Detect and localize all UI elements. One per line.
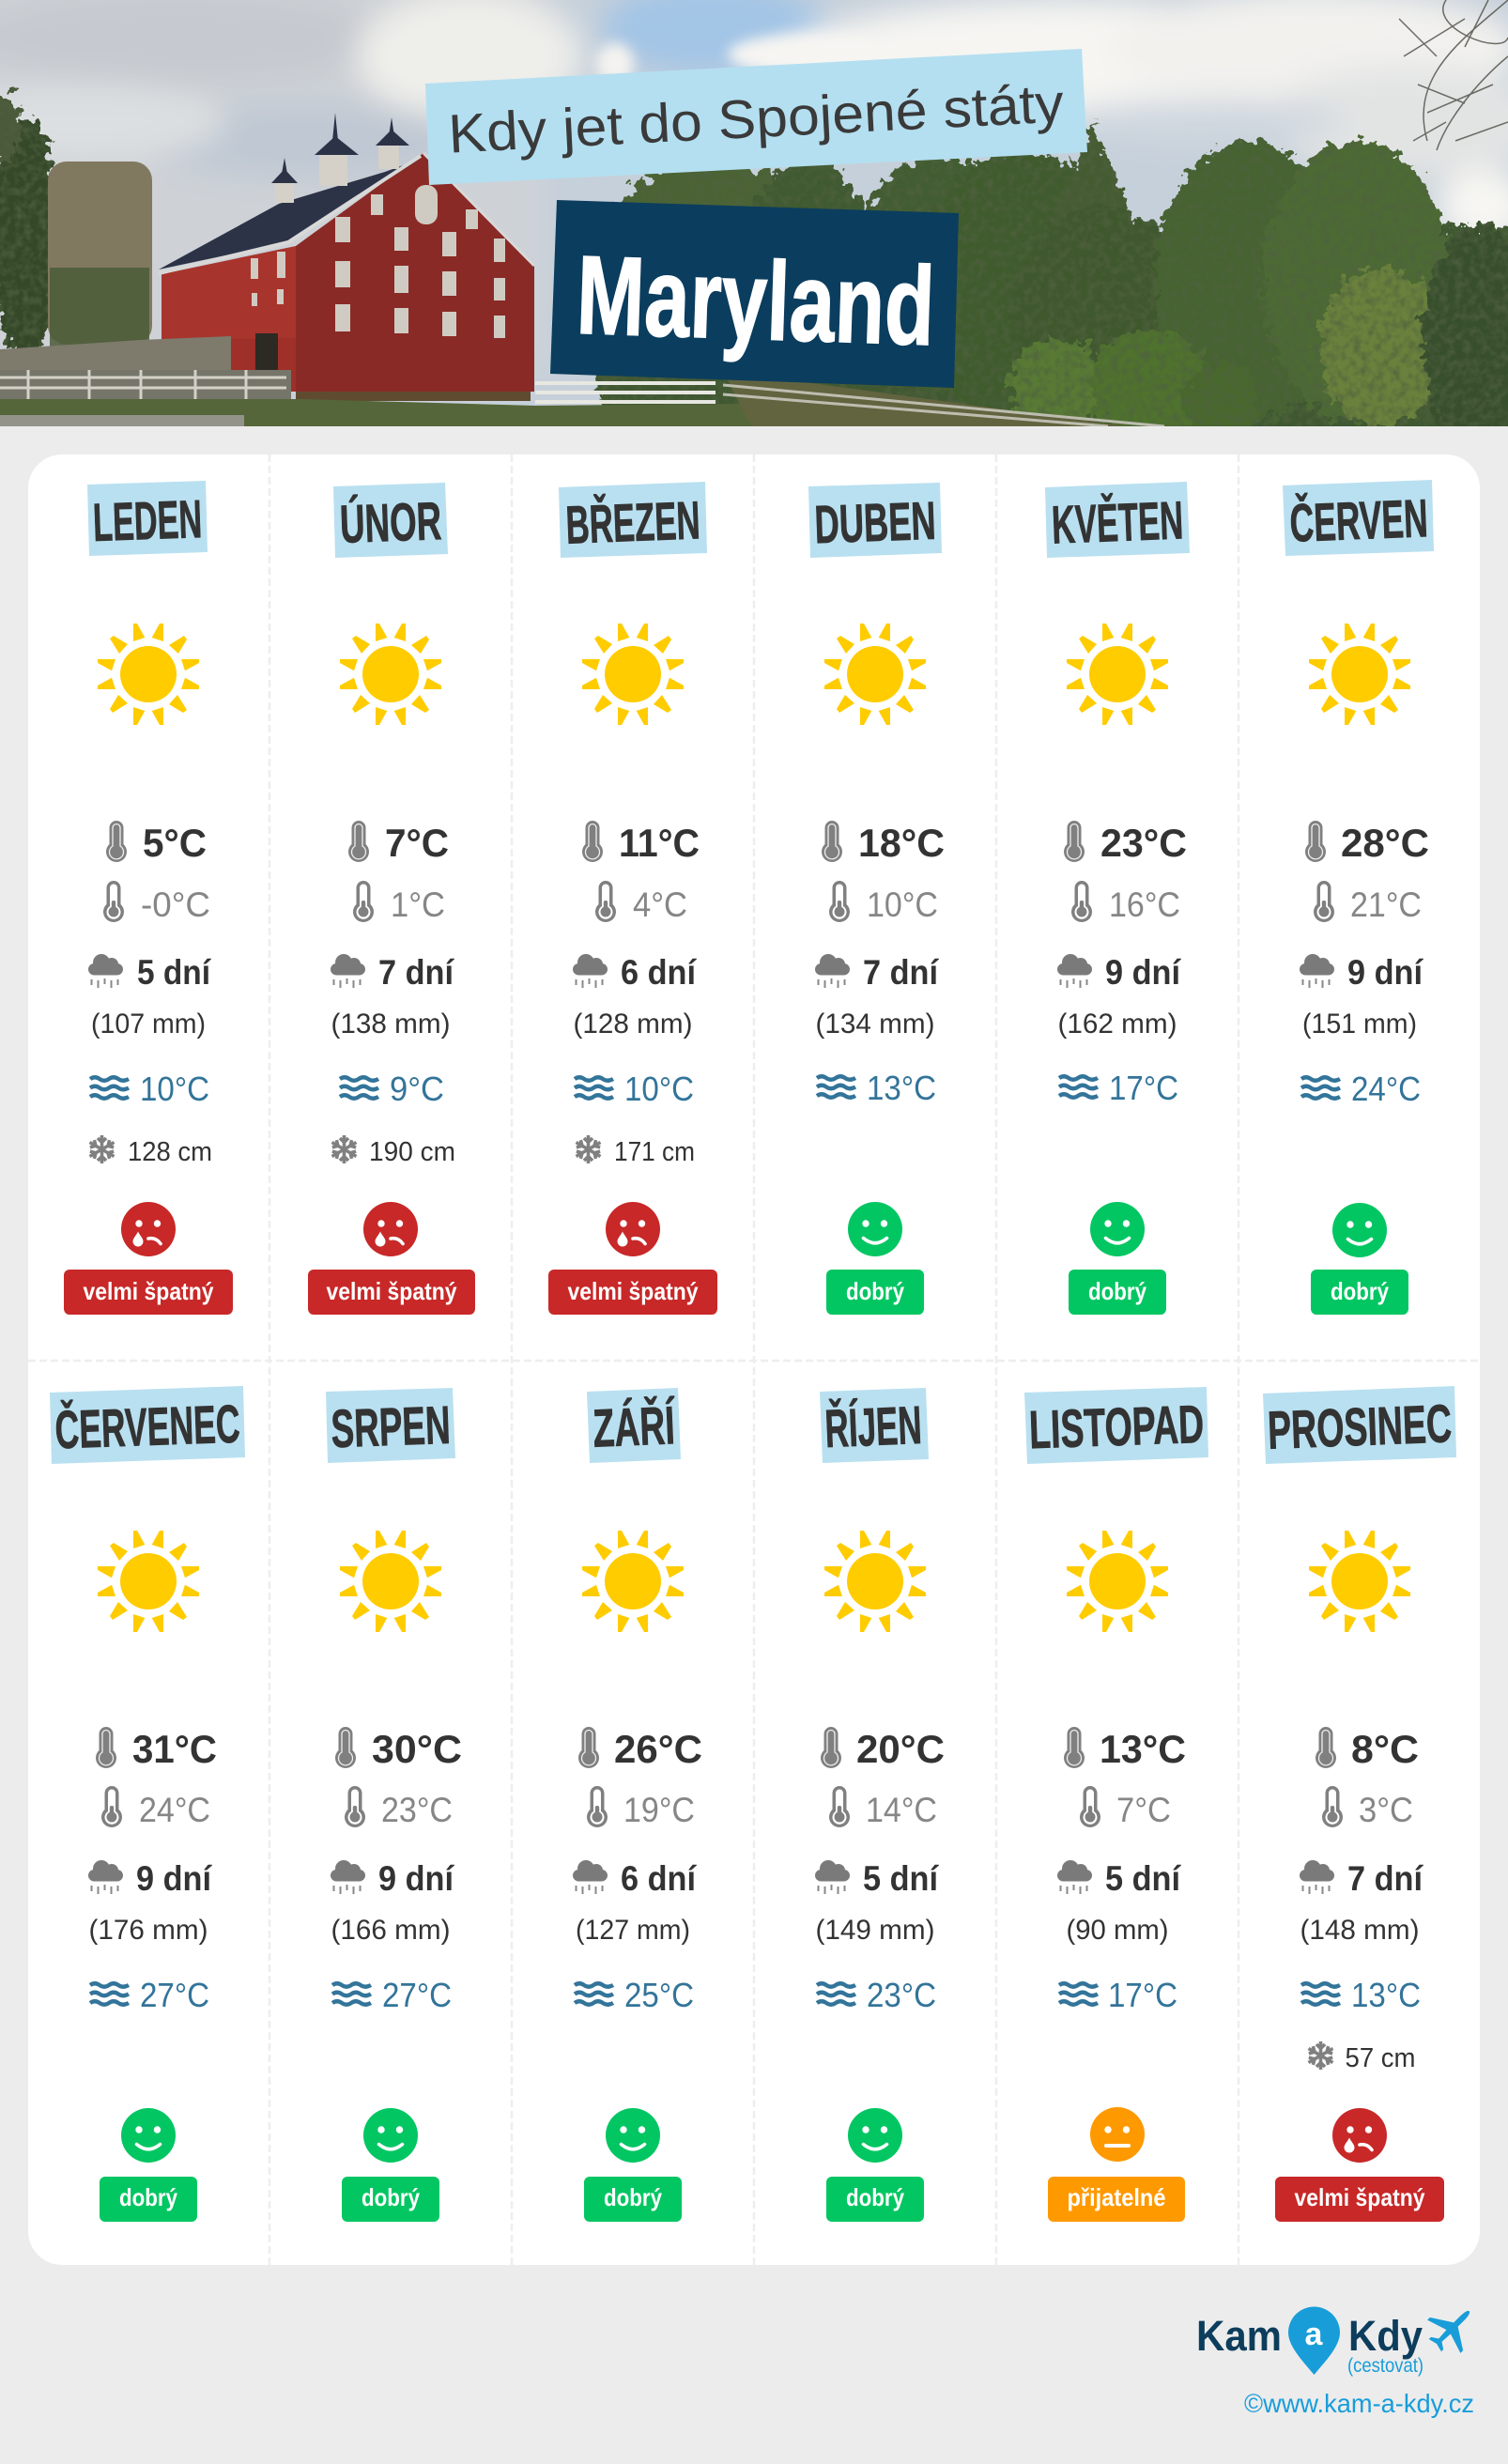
snow depth	[330, 1135, 455, 1167]
rating badge	[1275, 2177, 1444, 2222]
month data: DUBEN	[815, 624, 945, 1315]
rating badge	[1048, 2177, 1185, 2222]
precipitation: (151 mm)	[1302, 1009, 1417, 1040]
icon: good face	[848, 1202, 902, 1256]
icon: sun	[1067, 1531, 1168, 1632]
sea temperature: 17°C	[1108, 1976, 1177, 2014]
icon: sun	[1067, 624, 1168, 725]
precipitation: (166 mm)	[331, 1915, 451, 1946]
sea temperature	[817, 1069, 936, 1107]
month panel: ČERVENEC	[50, 1386, 245, 2222]
precipitation: (176 mm)	[88, 1915, 208, 1946]
min temperature: 24°C	[139, 1791, 210, 1829]
month data: LISTOPAD	[1048, 1531, 1186, 2222]
max temperature	[582, 821, 700, 865]
max temperature: 31°C	[132, 1727, 217, 1771]
rain days: 9 dní	[378, 1859, 455, 1898]
sea temperature	[332, 1976, 452, 2014]
sea temperature: 13°C	[867, 1069, 936, 1107]
snow depth: 171 cm	[614, 1137, 695, 1167]
min temperature	[595, 881, 687, 924]
rating badge	[1069, 1270, 1166, 1315]
title banner: Maryland	[575, 233, 936, 369]
icon: very bad face	[606, 1202, 660, 1256]
header photo: red barn in Maryland	[0, 0, 1508, 451]
month title: SRPEN: SRPEN	[330, 1395, 452, 1459]
month data: BŘEZEN	[548, 624, 717, 1315]
rain days	[88, 953, 212, 992]
month data: SRPEN	[331, 1531, 462, 2222]
icon: sun	[98, 1531, 199, 1632]
precipitation: (90 mm)	[1067, 1915, 1168, 1946]
subtitle banner: Kdy jet do Spojené státy	[447, 72, 1065, 165]
sea temperature	[90, 1070, 209, 1108]
max temperature: 11°C	[619, 821, 700, 865]
max temperature	[348, 821, 449, 865]
rain days: 7 dní	[378, 953, 455, 992]
icon: good face	[606, 2108, 660, 2163]
icon: sun	[582, 624, 684, 725]
month title: ZÁŘÍ	[587, 1388, 681, 1463]
min temperature	[829, 1786, 937, 1829]
rain days: 9 dní	[1347, 953, 1424, 992]
sea temperature: 9°C	[390, 1070, 444, 1108]
rain days	[1300, 953, 1424, 992]
icon: very bad face	[363, 1202, 418, 1256]
icon: sun	[340, 624, 441, 725]
rating badge: přijatelné	[1067, 2183, 1166, 2211]
month data: KVĚTEN	[1057, 624, 1187, 1315]
icon: very bad face	[1332, 2108, 1387, 2163]
rating badge	[1311, 1270, 1408, 1315]
min temperature: 16°C	[1109, 886, 1180, 924]
rain days	[573, 1859, 698, 1898]
rain days	[1057, 953, 1182, 992]
rain days	[1057, 1859, 1182, 1898]
rain days	[331, 1859, 455, 1898]
month data: ŘÍJEN	[815, 1531, 945, 2222]
sea temperature: 27°C	[382, 1976, 452, 2014]
logo word: Kdy: Kdy	[1348, 2312, 1423, 2360]
sea temperature	[1059, 1976, 1177, 2014]
month title: BŘEZEN	[559, 482, 707, 558]
sea temperature: 10°C	[140, 1070, 209, 1108]
precipitation: (149 mm)	[815, 1915, 935, 1946]
month title: BŘEZEN: BŘEZEN	[564, 489, 701, 556]
sea temperature	[1301, 1976, 1421, 2014]
month panel: BŘEZEN	[548, 482, 717, 1315]
sea temperature	[1301, 1070, 1421, 1108]
month title: ČERVEN: ČERVEN	[1288, 487, 1429, 554]
rating badge: dobrý	[846, 2183, 904, 2211]
month title: LEDEN: LEDEN	[92, 489, 203, 553]
max temperature: 18°C	[858, 821, 945, 865]
month title: LISTOPAD: LISTOPAD	[1028, 1394, 1205, 1460]
month panel: ZÁŘÍ	[573, 1388, 702, 2222]
snow depth: 128 cm	[128, 1137, 212, 1167]
sea temperature: 27°C	[140, 1976, 209, 2014]
icon: very bad face	[121, 1202, 176, 1256]
month panel: KVĚTEN	[1045, 482, 1190, 1315]
rain days: 9 dní	[1105, 953, 1182, 992]
icon: good face	[848, 2108, 902, 2163]
min temperature	[1071, 881, 1180, 924]
month title: LEDEN	[87, 481, 208, 556]
snow depth: 190 cm	[369, 1137, 455, 1167]
title banner	[550, 200, 959, 388]
sea temperature	[817, 1976, 936, 2014]
month title: ŘÍJEN: ŘÍJEN	[823, 1394, 923, 1459]
month title: ÚNOR: ÚNOR	[339, 491, 442, 555]
sea temperature: 17°C	[1109, 1069, 1178, 1107]
max temperature: 23°C	[1100, 821, 1187, 865]
rain days: 5 dní	[1105, 1859, 1182, 1898]
max temperature: 28°C	[1341, 821, 1429, 865]
sea temperature	[340, 1070, 444, 1108]
max temperature: 13°C	[1100, 1727, 1186, 1771]
icon: map pin with letter a	[1288, 2306, 1340, 2375]
logo word: Kam: Kam	[1196, 2312, 1282, 2360]
icon: neutral face	[1090, 2107, 1145, 2162]
min temperature	[829, 881, 938, 924]
sea temperature	[1059, 1069, 1178, 1107]
min temperature: 21°C	[1350, 886, 1422, 924]
rating badge: dobrý	[1331, 1277, 1389, 1305]
min temperature	[1314, 881, 1422, 924]
min temperature	[103, 881, 210, 924]
month title: LISTOPAD	[1024, 1387, 1208, 1464]
month data: LEDEN	[64, 624, 233, 1315]
rating badge: velmi špatný	[1294, 2183, 1425, 2211]
min temperature	[101, 1786, 210, 1829]
snow depth	[1306, 2041, 1416, 2073]
icon: sun	[824, 624, 926, 725]
max temperature	[822, 821, 945, 865]
month title: SRPEN	[326, 1388, 455, 1463]
month title: DUBEN	[808, 483, 942, 558]
month title: ČERVEN	[1283, 480, 1434, 556]
max temperature	[1064, 1727, 1186, 1771]
rating badge	[342, 2177, 439, 2222]
max temperature	[106, 821, 207, 865]
rain days	[815, 953, 940, 992]
month title: ŘÍJEN	[820, 1388, 929, 1463]
website credit: ©www.kam-a-kdy.cz	[1244, 2389, 1474, 2418]
max temperature	[1316, 1727, 1419, 1771]
min temperature	[353, 881, 445, 924]
rating badge	[64, 1270, 233, 1315]
month title: KVĚTEN: KVĚTEN	[1051, 489, 1184, 556]
month panel: ČERVEN	[1283, 480, 1434, 1315]
snow depth	[87, 1135, 212, 1167]
rating badge: dobrý	[846, 1277, 904, 1305]
sea temperature: 10°C	[624, 1070, 694, 1108]
icon: sun	[1309, 1531, 1410, 1632]
month title: ÚNOR	[333, 483, 448, 558]
icon: sun	[98, 624, 199, 725]
icon: good face	[1332, 1203, 1387, 1257]
min temperature	[1080, 1786, 1171, 1829]
logo tagline: (cestovat)	[1347, 2355, 1423, 2377]
month panel: ÚNOR	[308, 483, 475, 1315]
max temperature	[335, 1727, 462, 1771]
rain days: 6 dní	[621, 953, 698, 992]
rain days	[1300, 1859, 1424, 1898]
rain days	[573, 953, 698, 992]
snow depth	[574, 1135, 695, 1167]
month title: KVĚTEN	[1045, 482, 1190, 558]
month data: PROSINEC	[1275, 1531, 1444, 2222]
icon: map pin with letter a: a	[1305, 2317, 1324, 2352]
rain days: 7 dní	[863, 953, 940, 992]
month data: ČERVEN	[1300, 624, 1429, 1315]
panel: monthly climate table	[28, 454, 1480, 2265]
min temperature: 4°C	[633, 886, 687, 924]
rain days: 7 dní	[1347, 1859, 1424, 1898]
min temperature: 3°C	[1359, 1791, 1413, 1829]
icon: airplane	[1419, 2295, 1485, 2362]
max temperature: 26°C	[614, 1727, 702, 1771]
rating badge: velmi špatný	[567, 1277, 699, 1305]
max temperature	[96, 1727, 217, 1771]
rating badge	[548, 1270, 717, 1315]
min temperature	[345, 1786, 453, 1829]
max temperature: 30°C	[372, 1727, 462, 1771]
sea temperature: 13°C	[1351, 1976, 1421, 2014]
max temperature: 20°C	[856, 1727, 945, 1771]
rating badge: dobrý	[1088, 1277, 1146, 1305]
icon: sun	[1309, 624, 1410, 725]
min temperature: 14°C	[866, 1791, 937, 1829]
rain days: 5 dní	[137, 953, 212, 992]
min temperature: 23°C	[381, 1791, 453, 1829]
min temperature	[1322, 1786, 1413, 1829]
month data: ZÁŘÍ	[573, 1531, 702, 2222]
rating badge	[826, 2177, 924, 2222]
sea temperature	[575, 1070, 694, 1108]
month panel: DUBEN	[808, 483, 945, 1315]
month panel: SRPEN	[326, 1388, 462, 2222]
max temperature	[1064, 821, 1187, 865]
month title: DUBEN: DUBEN	[814, 491, 937, 555]
icon: sun	[582, 1531, 684, 1632]
precipitation: (134 mm)	[815, 1009, 935, 1040]
min temperature	[587, 1786, 695, 1829]
sea temperature	[90, 1976, 209, 2014]
month panel: PROSINEC	[1263, 1386, 1456, 2222]
min temperature: 19°C	[623, 1791, 695, 1829]
precipitation: (138 mm)	[331, 1009, 451, 1040]
month data: ČERVENEC	[88, 1531, 217, 2222]
icon: good face	[121, 2108, 176, 2163]
icon: sun	[824, 1531, 926, 1632]
rating badge: dobrý	[362, 2183, 420, 2211]
rating badge: dobrý	[604, 2183, 662, 2211]
rating badge	[826, 1270, 924, 1315]
precipitation: (148 mm)	[1300, 1915, 1420, 1946]
max temperature: 8°C	[1351, 1727, 1419, 1771]
month panel: ŘÍJEN	[815, 1388, 945, 2222]
rating badge	[308, 1270, 475, 1315]
max temperature: 5°C	[143, 821, 207, 865]
rain days: 9 dní	[136, 1859, 213, 1898]
month data: ÚNOR	[308, 624, 475, 1315]
precipitation: (107 mm)	[91, 1009, 206, 1040]
icon: good face	[363, 2108, 418, 2163]
snow depth: 57 cm	[1345, 2043, 1416, 2073]
month title: ČERVENEC: ČERVENEC	[54, 1394, 241, 1460]
rain days	[815, 1859, 940, 1898]
sea temperature: 25°C	[624, 1976, 694, 2014]
precipitation: (162 mm)	[1057, 1009, 1177, 1040]
rain days: 5 dní	[863, 1859, 940, 1898]
month panel: LISTOPAD	[1024, 1387, 1208, 2222]
month title: ČERVENEC	[50, 1386, 245, 1464]
month panel: LEDEN	[64, 481, 233, 1315]
sea temperature: 24°C	[1351, 1070, 1421, 1108]
precipitation: (127 mm)	[576, 1915, 690, 1946]
min temperature: -0°C	[141, 886, 210, 924]
icon: sun	[340, 1531, 441, 1632]
rating badge: dobrý	[119, 2183, 177, 2211]
min temperature: 7°C	[1116, 1791, 1171, 1829]
precipitation: (128 mm)	[573, 1009, 693, 1040]
month title: ZÁŘÍ: ZÁŘÍ	[592, 1394, 677, 1459]
rating badge	[100, 2177, 197, 2222]
subtitle banner	[425, 49, 1087, 185]
rain days: 6 dní	[621, 1859, 698, 1898]
sea temperature	[575, 1976, 694, 2014]
rating badge: velmi špatný	[327, 1277, 457, 1305]
rating badge: velmi špatný	[83, 1277, 214, 1305]
rain days	[331, 953, 455, 992]
logo: Kam a Kdy	[1196, 2295, 1485, 2377]
icon: good face	[1090, 1202, 1145, 1256]
rain days	[88, 1859, 213, 1898]
min temperature: 1°C	[391, 886, 445, 924]
rating badge	[584, 2177, 682, 2222]
min temperature: 10°C	[867, 886, 938, 924]
max temperature: 7°C	[385, 821, 449, 865]
sea temperature: 23°C	[867, 1976, 936, 2014]
